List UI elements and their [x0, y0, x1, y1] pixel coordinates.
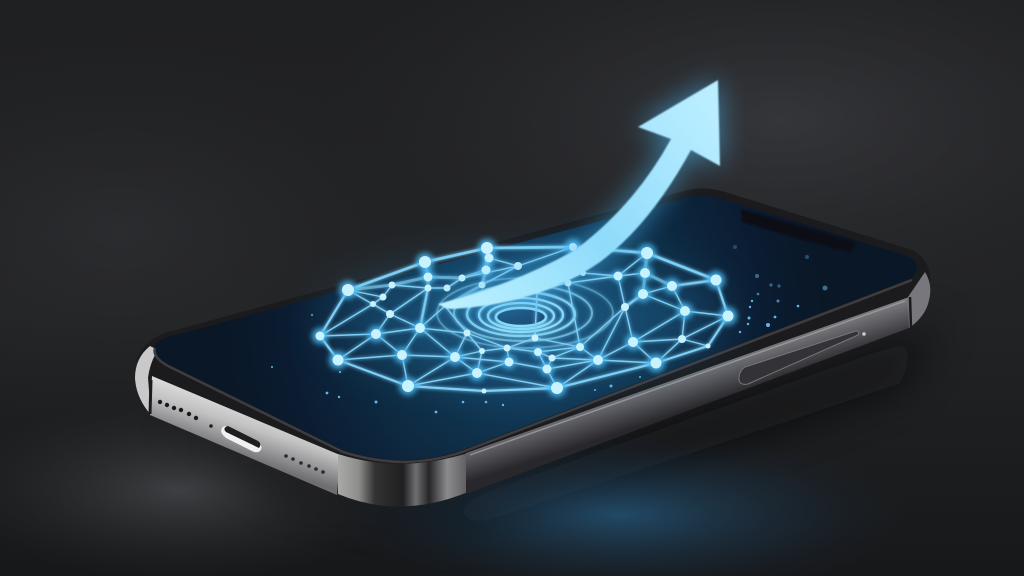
- side button: [739, 331, 859, 384]
- phone: [130, 180, 940, 507]
- bottom silver side face: [150, 376, 340, 495]
- bezel lip: [155, 280, 912, 462]
- network nodes: [316, 242, 734, 394]
- blue reflection on table: [330, 430, 910, 576]
- antenna seam left: [150, 380, 151, 414]
- right corner cap: [908, 272, 930, 328]
- concentric rings: [437, 278, 613, 348]
- network glow: [325, 256, 725, 380]
- outer ring lines: [320, 247, 728, 391]
- arrow glow: [440, 80, 720, 311]
- network nodes glow: [312, 239, 737, 397]
- microphone dot: [209, 424, 213, 428]
- screen: [154, 196, 917, 460]
- phone body top frame: [137, 188, 930, 470]
- network web: [320, 247, 728, 391]
- thick upper lines: [348, 247, 716, 328]
- front corner banded metal: [338, 453, 468, 507]
- star particles: [271, 245, 828, 413]
- speaker holes left: [158, 400, 198, 420]
- side face highlight: [470, 301, 905, 455]
- speaker holes right: [284, 454, 325, 474]
- right long side face: [466, 296, 912, 494]
- rising arrow: [438, 80, 720, 311]
- charging port: [221, 426, 262, 452]
- phone shadow: [160, 315, 945, 530]
- antenna seam right: [910, 297, 911, 328]
- small side hole: [862, 332, 866, 336]
- arrow shape: [438, 80, 720, 309]
- inner connection lines: [320, 247, 728, 388]
- left rounded corner cap: [135, 346, 158, 415]
- notch: [741, 209, 856, 252]
